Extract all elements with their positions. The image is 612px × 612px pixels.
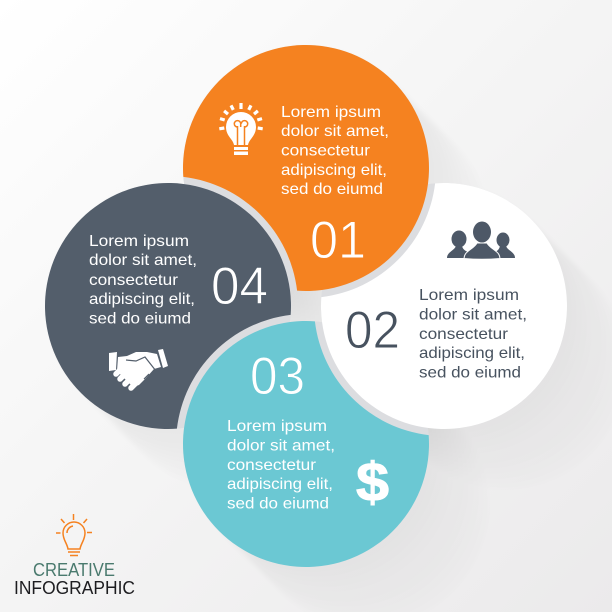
panel: 03 teal [183, 321, 429, 567]
icon: light bulb [219, 103, 263, 155]
panel: 02 white [321, 183, 567, 429]
teal shape [183, 321, 429, 567]
text block 01: sed do eiumd [281, 181, 383, 198]
text block 01 [281, 104, 389, 198]
icon: logo bulb [56, 514, 92, 556]
text block 04: sed do eiumd [89, 310, 191, 328]
text block 03: dolor sit amet, [227, 438, 335, 454]
number 01: 01 [310, 211, 366, 270]
text block 03: adipiscing elit, [227, 476, 333, 493]
text block 03: consectetur [227, 457, 317, 474]
text block 02: consectetur [419, 326, 509, 343]
text block 02: dolor sit amet, [419, 306, 527, 324]
text block 02: Lorem ipsum [419, 287, 519, 304]
text block 01: consectetur [281, 142, 371, 160]
orange shape [183, 45, 429, 291]
separator bands [45, 45, 567, 567]
text block 03: Lorem ipsum [227, 418, 327, 435]
logo text: infographic: INFOGRAPHIC [14, 577, 135, 598]
icon: handshake [109, 349, 168, 388]
number 03: 03 [250, 347, 305, 406]
text block 02 [419, 287, 527, 382]
text block 01: Lorem ipsum [281, 104, 381, 121]
white shape [321, 183, 567, 429]
text block 02: sed do eiumd [419, 364, 521, 382]
number 04: 04 [211, 257, 268, 316]
icon: people [447, 222, 515, 259]
text block 04 [89, 233, 197, 328]
text block 04: dolor sit amet, [89, 252, 197, 269]
number 02: 02 [345, 301, 400, 360]
text block 01: dolor sit amet, [281, 123, 389, 140]
panel: 01 orange [183, 45, 429, 291]
logo [14, 514, 135, 598]
text block 03: sed do eiumd [227, 496, 329, 512]
text block 04: consectetur [89, 272, 179, 289]
panel: 04 dark [45, 183, 291, 429]
text block 03 [227, 418, 335, 512]
dark shape [45, 183, 291, 429]
text block 04: Lorem ipsum [89, 233, 189, 250]
icon: dollar: $ [356, 451, 389, 513]
logo text: creative: CREATIVE [33, 560, 115, 580]
text block 01: adipiscing elit, [281, 162, 387, 179]
text block 04: adipiscing elit, [89, 291, 195, 308]
text block 02: adipiscing elit, [419, 345, 525, 362]
